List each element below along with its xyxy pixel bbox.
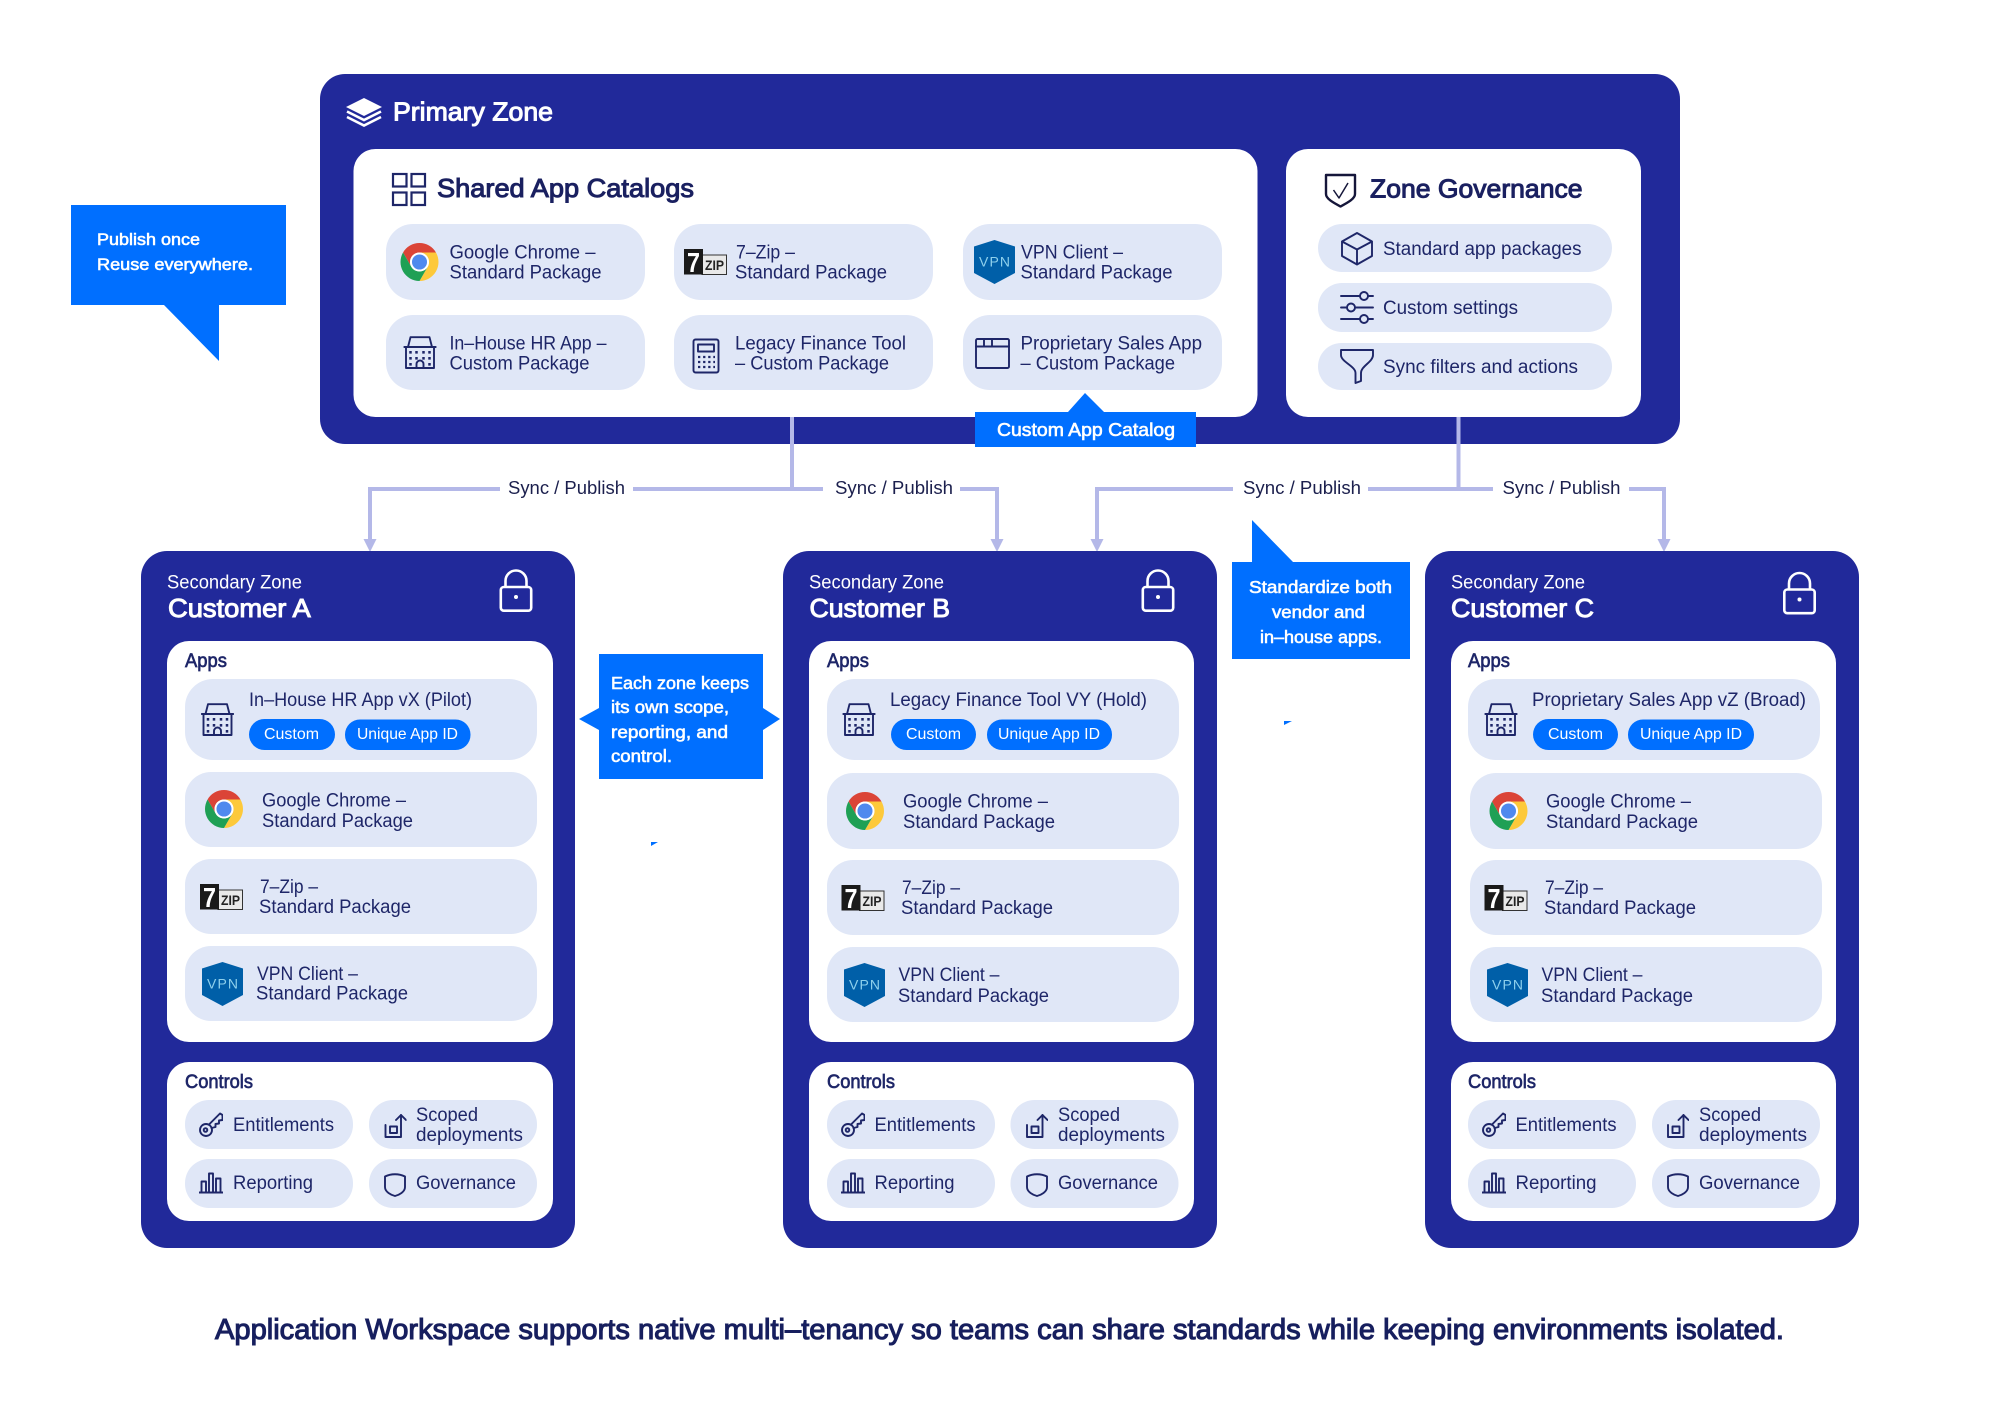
icon: shield — [1027, 1174, 1047, 1196]
tag: custom app catalog: Custom App Catalog — [997, 420, 1175, 440]
app: vpn client: Standard Package — [898, 986, 1049, 1007]
icon: 7-zip — [842, 883, 884, 914]
app: 7-zip — [185, 859, 537, 934]
catalog item: VPN Client: Standard Package — [1020, 263, 1172, 284]
icon: 7-zip — [1484, 883, 1527, 914]
icon: vpn shield — [1487, 963, 1528, 1007]
icon: scoped — [1027, 1115, 1048, 1137]
icon: 7-zip: 7 — [844, 883, 858, 914]
app: in-house HR — [185, 679, 537, 760]
catalog item: VPN Client: VPN Client – — [1021, 243, 1123, 264]
catalog item: Google Chrome: Google Chrome – — [450, 243, 596, 264]
app: legacy finance tool: Legacy Finance Tool VY (Hold) — [890, 690, 1147, 711]
catalog item: 7-Zip: 7–Zip – — [736, 243, 795, 264]
app: google chrome: Standard Package — [903, 812, 1055, 833]
panel: shared app catalogs — [354, 149, 1258, 417]
panel: apps — [1451, 641, 1836, 1042]
callout: standardize both — [1232, 520, 1410, 659]
governance item: standard app packages: Standard app packages — [1383, 239, 1582, 260]
app: google chrome — [185, 772, 537, 847]
app: google chrome — [1470, 773, 1822, 849]
control: reporting — [185, 1159, 353, 1208]
icon: chrome — [205, 790, 243, 828]
control: entitlements — [185, 1100, 353, 1149]
tag: custom app catalog — [975, 393, 1196, 447]
tag: custom — [1533, 719, 1618, 750]
control: entitlements — [1468, 1100, 1636, 1149]
icon: 7-zip — [200, 882, 242, 913]
app: vpn client: Standard Package — [256, 984, 408, 1004]
control: scoped deployments — [1010, 1100, 1178, 1149]
control: scoped deployments — [369, 1100, 537, 1149]
catalog item: Google Chrome — [386, 224, 645, 300]
callout: standardize both: vendor and — [1272, 602, 1365, 622]
callout: standardize both: Standardize both — [1249, 577, 1392, 597]
arrows: sync and publish connectors — [364, 417, 1670, 552]
callout: each zone keeps — [579, 654, 780, 779]
app: 7-zip: Standard Package — [901, 898, 1053, 919]
icon: building — [404, 337, 436, 368]
panel: customer B — [783, 551, 1217, 1248]
control: scoped deployments: deployments — [1699, 1125, 1807, 1146]
control: governance: Governance — [416, 1173, 516, 1194]
tag: custom: Custom — [264, 726, 319, 743]
heading: zone governance: Zone Governance — [1370, 174, 1582, 204]
footer statement: Application Workspace supports native multi–tenancy so teams can share standards while keeping environments isolated. — [215, 1314, 1784, 1346]
panel: zone governance — [1286, 149, 1641, 417]
app: vpn client: VPN Client – — [1542, 965, 1643, 986]
callout: publish once: Publish once — [97, 230, 200, 249]
control: scoped deployments — [1652, 1100, 1820, 1149]
app: vpn client — [827, 947, 1179, 1022]
heading: apps: Apps — [185, 651, 227, 672]
tag: custom — [891, 719, 976, 750]
icon: key — [200, 1114, 222, 1136]
icon: key — [842, 1114, 864, 1136]
catalog item: Proprietary Sales App — [963, 315, 1222, 390]
app: 7-zip: 7–Zip – — [902, 878, 960, 899]
control: reporting: Reporting — [1516, 1173, 1596, 1194]
app: 7-zip: Standard Package — [1544, 898, 1696, 919]
icon: shield — [385, 1174, 405, 1196]
heading: customer B: Customer B — [810, 593, 950, 623]
control: entitlements: Entitlements — [874, 1115, 976, 1136]
catalog item: VPN Client — [963, 224, 1222, 300]
icon: 7-zip: ZIP — [1506, 893, 1524, 909]
panel: apps — [167, 641, 553, 1042]
app: vpn client: Standard Package — [1541, 986, 1693, 1007]
governance item: standard app packages — [1318, 224, 1612, 272]
label: sync publish A: Sync / Publish — [508, 477, 625, 498]
app: vpn client: VPN Client – — [257, 964, 358, 985]
label: secondary zone: Secondary Zone — [809, 573, 944, 594]
catalog item: Legacy Finance Tool: – Custom Package — [735, 354, 889, 375]
tag: unique app id: Unique App ID — [998, 726, 1100, 743]
app: google chrome: Google Chrome – — [1546, 792, 1691, 812]
app: 7-zip: Standard Package — [259, 897, 411, 918]
app: 7-zip — [827, 860, 1179, 935]
app: 7-zip: 7–Zip – — [1545, 878, 1603, 899]
heading: apps: Apps — [827, 651, 869, 672]
app: vpn client: VPN Client – — [898, 965, 1000, 986]
tag: custom — [249, 719, 335, 750]
icon: 7-zip: 7 — [1488, 883, 1500, 914]
label: sync publish B2: Sync / Publish — [1243, 477, 1361, 498]
icon: vpn shield: VPN — [979, 254, 1010, 270]
control: governance — [1652, 1159, 1820, 1208]
tag: unique app id: Unique App ID — [357, 726, 458, 743]
catalog item: In-House HR App — [386, 315, 645, 390]
icon: 7-zip: 7 — [687, 247, 700, 278]
app: 7-zip — [1470, 860, 1822, 935]
control: scoped deployments: deployments — [416, 1125, 523, 1146]
catalog item: Proprietary Sales App: Proprietary Sales App — [1020, 334, 1202, 355]
icon: bars — [1482, 1174, 1506, 1192]
icon: vpn shield: VPN — [207, 976, 238, 992]
panel: apps — [809, 641, 1194, 1042]
icon: vpn shield: VPN — [849, 976, 880, 992]
control: entitlements — [827, 1100, 995, 1149]
control: scoped deployments: deployments — [1058, 1125, 1165, 1146]
app: in-house HR: In–House HR App vX (Pilot) — [249, 690, 472, 711]
app: google chrome: Standard Package — [1546, 812, 1698, 833]
icon: scoped — [386, 1115, 406, 1137]
icon: window — [976, 339, 1009, 368]
heading: primary zone: Primary Zone — [393, 96, 553, 126]
panel: primary zone — [320, 74, 1680, 444]
icon: calculator — [694, 340, 718, 372]
label: secondary zone: Secondary Zone — [1451, 573, 1585, 594]
icon: 7-zip: ZIP — [862, 893, 882, 909]
control: governance — [369, 1159, 537, 1208]
icon: vpn shield — [844, 963, 885, 1007]
control: reporting — [827, 1159, 995, 1208]
control: entitlements: Entitlements — [233, 1115, 334, 1136]
panel: customer C — [1425, 551, 1859, 1248]
panel: controls — [167, 1062, 553, 1221]
app: google chrome — [827, 773, 1179, 849]
control: scoped deployments: Scoped — [1058, 1105, 1120, 1126]
label: sync publish B: Sync / Publish — [835, 477, 953, 498]
icon: scoped — [1668, 1115, 1688, 1137]
app: proprietary sales app: Proprietary Sales App vZ (Broad) — [1532, 690, 1806, 711]
catalog item: 7-Zip: Standard Package — [735, 263, 887, 284]
callout: publish once — [71, 205, 286, 361]
control: reporting: Reporting — [233, 1173, 313, 1194]
governance item: sync filters and actions: Sync filters and actions — [1383, 357, 1578, 378]
icon: vpn shield — [974, 240, 1015, 284]
icon: building — [1485, 704, 1517, 735]
tag: custom: Custom — [1548, 726, 1603, 743]
app: google chrome: Standard Package — [262, 811, 413, 832]
heading: controls: Controls — [827, 1072, 895, 1093]
callout: standardize both: in–house apps. — [1260, 627, 1382, 647]
app: google chrome: Google Chrome – — [903, 792, 1048, 812]
tag: unique app id — [1628, 720, 1754, 750]
catalog item: In-House HR App: In–House HR App – — [450, 334, 607, 355]
governance item: sync filters and actions — [1318, 343, 1612, 390]
heading: customer A: Customer A — [168, 593, 311, 623]
heading: controls: Controls — [1468, 1072, 1536, 1093]
catalog item: In-House HR App: Custom Package — [450, 354, 590, 375]
governance item: custom settings: Custom settings — [1383, 298, 1518, 319]
icon: building — [843, 704, 875, 735]
app: vpn client — [1470, 947, 1822, 1022]
control: reporting: Reporting — [874, 1173, 954, 1194]
heading: customer C: Customer C — [1451, 593, 1594, 623]
callout: each zone keeps: control. — [611, 746, 672, 766]
icon: shield check — [1326, 175, 1355, 206]
tag: unique app id — [987, 720, 1112, 750]
control: scoped deployments: Scoped — [1699, 1105, 1761, 1126]
panel: controls — [1451, 1062, 1836, 1221]
icon: funnel — [1341, 350, 1373, 383]
catalog item: 7-Zip — [674, 224, 933, 300]
heading: controls: Controls — [185, 1072, 253, 1093]
governance item: custom settings — [1318, 283, 1612, 332]
icon: chrome — [846, 792, 884, 830]
icon: chrome — [1490, 792, 1527, 830]
catalog item: Google Chrome: Standard Package — [450, 263, 602, 284]
icon: 7-zip: ZIP — [705, 257, 724, 273]
icon: 7-zip: ZIP — [221, 892, 240, 908]
icon: building — [202, 704, 233, 735]
icon: grid — [393, 174, 425, 205]
icon: vpn shield — [202, 962, 243, 1006]
callout: each zone keeps: its own scope, — [611, 697, 729, 717]
control: governance — [1010, 1159, 1178, 1208]
icon: key — [1483, 1114, 1506, 1136]
heading: apps: Apps — [1468, 651, 1510, 672]
control: reporting — [1468, 1159, 1636, 1208]
icon: box — [1342, 233, 1372, 264]
icon: shield — [1668, 1174, 1688, 1196]
app: 7-zip: 7–Zip – — [260, 877, 318, 898]
tag: unique app id: Unique App ID — [1640, 726, 1742, 743]
panel: controls — [809, 1062, 1194, 1221]
app: proprietary sales app — [1468, 679, 1820, 760]
callout: each zone keeps: reporting, and — [611, 722, 728, 742]
icon: layers — [346, 98, 382, 126]
icon: 7-zip: 7 — [203, 882, 216, 913]
heading: shared app catalogs: Shared App Catalogs — [437, 173, 694, 203]
panel: customer A — [141, 551, 575, 1248]
icon: lock — [1784, 573, 1815, 613]
icon: lock — [501, 570, 531, 611]
icon: lock — [1143, 570, 1173, 611]
tag: unique app id — [345, 720, 470, 750]
catalog item: Legacy Finance Tool — [674, 315, 933, 390]
catalog item: Legacy Finance Tool: Legacy Finance Tool — [735, 334, 906, 355]
tag: custom: Custom — [906, 726, 961, 743]
app: vpn client — [185, 946, 537, 1021]
catalog item: Proprietary Sales App: – Custom Package — [1020, 354, 1175, 375]
control: entitlements: Entitlements — [1516, 1115, 1616, 1136]
control: governance: Governance — [1058, 1173, 1158, 1194]
label: sync publish C: Sync / Publish — [1502, 477, 1620, 498]
icon: sliders — [1341, 292, 1373, 323]
control: scoped deployments: Scoped — [416, 1105, 478, 1126]
icon: bars — [841, 1174, 865, 1192]
callout: each zone keeps: Each zone keeps — [611, 673, 749, 693]
control: governance: Governance — [1699, 1173, 1800, 1194]
label: secondary zone: Secondary Zone — [167, 573, 302, 594]
callout: publish once: Reuse everywhere. — [97, 255, 253, 274]
icon: 7-zip — [684, 247, 726, 278]
app: google chrome: Google Chrome – — [262, 790, 406, 812]
icon: chrome — [401, 243, 438, 281]
app: legacy finance tool — [827, 679, 1179, 760]
icon: bars — [199, 1174, 223, 1192]
icon: vpn shield: VPN — [1492, 976, 1523, 992]
